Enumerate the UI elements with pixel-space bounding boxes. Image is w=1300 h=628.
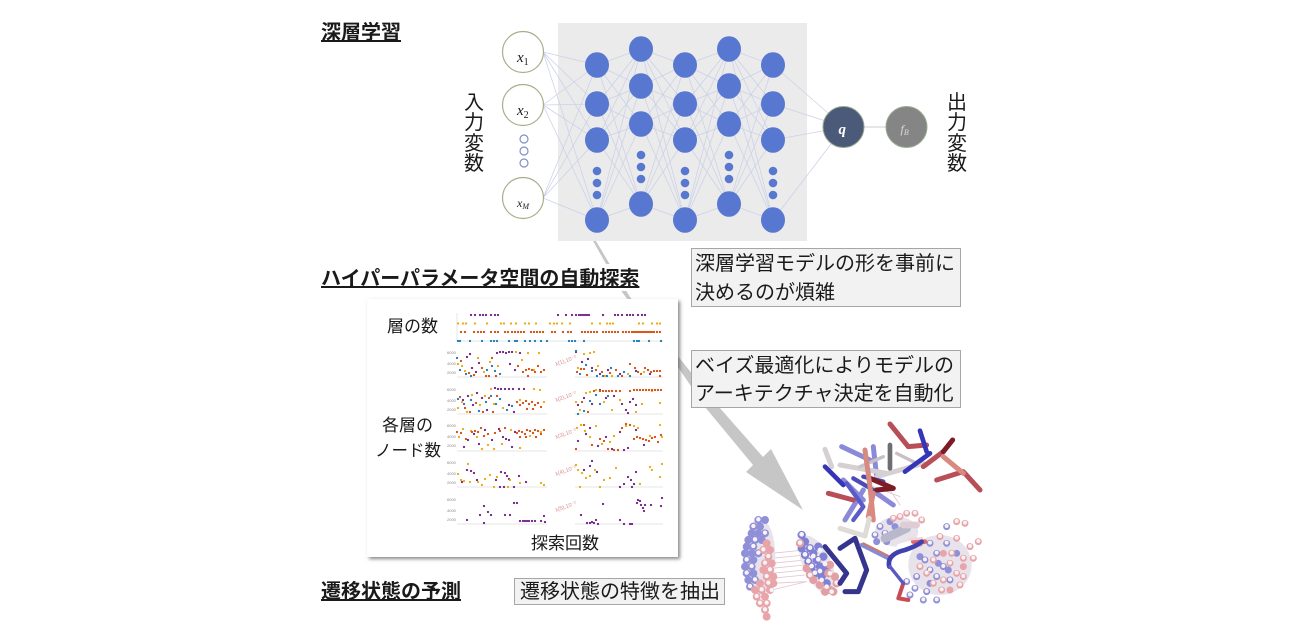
right atom cloud, red atoms [893, 513, 978, 590]
plot row 1 right [576, 352, 650, 374]
bond threads between clouds [772, 485, 900, 590]
chart: axis and rate labels: λ(1),10⁻² [555, 355, 577, 368]
plot row 2 right [578, 390, 636, 413]
callout: model shape: 深層学習モデルの形を事前に [695, 252, 955, 275]
chart: axis and rate labels: 4000 [447, 508, 457, 513]
label: input variables: 入 [464, 92, 484, 114]
output node fB: B [904, 128, 909, 137]
callout: bayesian optimization: アーキテクチャ決定を自動化 [695, 382, 954, 405]
label: input variables: 力 [464, 111, 484, 134]
chart: axis and rate labels: 6000 [447, 350, 457, 355]
heading: hyperparameter search: ハイパーパラメータ空間の自動探索 [321, 267, 639, 290]
chart: axis and rate labels [447, 350, 577, 522]
chart: axis and rate labels: 2000 [447, 370, 457, 375]
title: deep learning: 深層学習 [321, 21, 401, 44]
chart: axis and rate labels: 2000 [447, 443, 457, 448]
plot row 2 left [463, 388, 524, 412]
chart: learning rate scatter plots, right column [575, 351, 663, 524]
right atom cloud, highlights [875, 513, 978, 599]
label: output variables [947, 91, 967, 175]
output node q [823, 106, 864, 148]
label: output variables: 数 [947, 152, 967, 175]
chart: axis and rate labels: 4000 [447, 471, 457, 476]
chart: axis and rate labels: 6000 [447, 497, 457, 502]
chart: axis and rate labels: λ(5),10⁻² [555, 501, 577, 514]
chart: axis and rate labels: λ(2),10⁻² [555, 391, 577, 404]
input node labels: 1 [524, 57, 529, 68]
label: nodes per layer: 各層の [382, 416, 433, 435]
label: number of layers: 層の数 [387, 317, 438, 336]
plot row 5 right [581, 498, 662, 524]
middle atom cloud, red atoms [800, 543, 837, 592]
chart: layer count strip [457, 313, 663, 341]
callout: bayesian optimization [692, 350, 960, 408]
input node labels: x [517, 50, 524, 66]
plot row 3 left [464, 429, 515, 447]
label: search count: 探索回数 [531, 534, 599, 553]
middle atom cloud, highlights [800, 534, 837, 592]
chart: node count scatter plots, left column [457, 352, 547, 524]
output node q: q [838, 122, 846, 138]
callout: transition state features: 遷移状態の特徴を抽出 [520, 580, 720, 603]
callout: model shape [692, 248, 960, 306]
heading: transition state prediction: 遷移状態の予測 [321, 580, 461, 603]
white sticks [840, 518, 869, 536]
input nodes [502, 32, 544, 218]
input node labels: x [517, 196, 522, 210]
chart: axis and rate labels: 2000 [447, 480, 457, 485]
label: input variables: 変 [464, 132, 484, 155]
left atom cloud, blue atoms [745, 520, 765, 587]
right cloud fan of tubes [885, 528, 907, 538]
plot row 5 left [467, 503, 545, 523]
arrow: grey flow arrow [593, 241, 803, 510]
left atom cloud, red atoms [755, 543, 773, 617]
input node labels: M [521, 202, 530, 211]
label: input variables: 数 [464, 152, 484, 175]
label: output variables: 変 [947, 132, 967, 155]
chart: axis and rate labels: 6000 [447, 387, 457, 392]
red sticks [828, 424, 980, 500]
label: output variables: 出 [947, 91, 967, 114]
chart: axis and rate labels: 6000 [447, 460, 457, 465]
label: output variables: 力 [947, 111, 967, 134]
callout: model shape: 決めるのが煩雑 [695, 281, 835, 304]
hidden layer nodes [585, 36, 785, 233]
plot row 1 left [467, 352, 520, 372]
label: nodes per layer [375, 416, 441, 460]
label: input variables [464, 92, 484, 175]
right cloud central blob [900, 543, 915, 547]
lower loop [862, 545, 888, 558]
blue sticks [825, 431, 930, 485]
plot row 3 right [578, 428, 644, 450]
chart: axis and rate labels: λ(3),10⁻² [555, 428, 577, 441]
panel: search results chart [367, 299, 678, 557]
chart: axis and rate labels: 2000 [447, 407, 457, 412]
atom cloud haze [745, 517, 972, 600]
plot row 4 right [584, 461, 636, 487]
output node fB: f [900, 122, 904, 136]
panel: neural network background [558, 23, 807, 241]
input node labels: x [517, 103, 524, 119]
navy sticks [825, 538, 867, 592]
middle atom cloud, blue atoms [802, 535, 827, 583]
input node labels: 2 [524, 110, 529, 121]
chart: axis and rate labels: 2000 [447, 517, 457, 522]
chart: axis and rate labels: 4000 [447, 434, 457, 439]
chart: axis and rate labels: 4000 [447, 361, 457, 366]
chart: axis and rate labels: 6000 [447, 423, 457, 428]
network connections [543, 49, 907, 220]
molecular structure [745, 424, 980, 617]
label: nodes per layer: ノード数 [375, 441, 441, 460]
mid-tone sticks [842, 447, 893, 520]
left atom cloud, highlights [747, 519, 772, 609]
callout: bayesian optimization: ベイズ最適化によりモデルの [695, 354, 954, 377]
output node fB [886, 106, 927, 148]
chart: axis and rate labels: 4000 [447, 398, 457, 403]
chart: axis and rate labels: λ(4),10⁻² [555, 465, 577, 478]
input node labels [516, 50, 530, 211]
right atom cloud, blue atoms [875, 522, 957, 600]
plot row 4 left [462, 470, 526, 487]
